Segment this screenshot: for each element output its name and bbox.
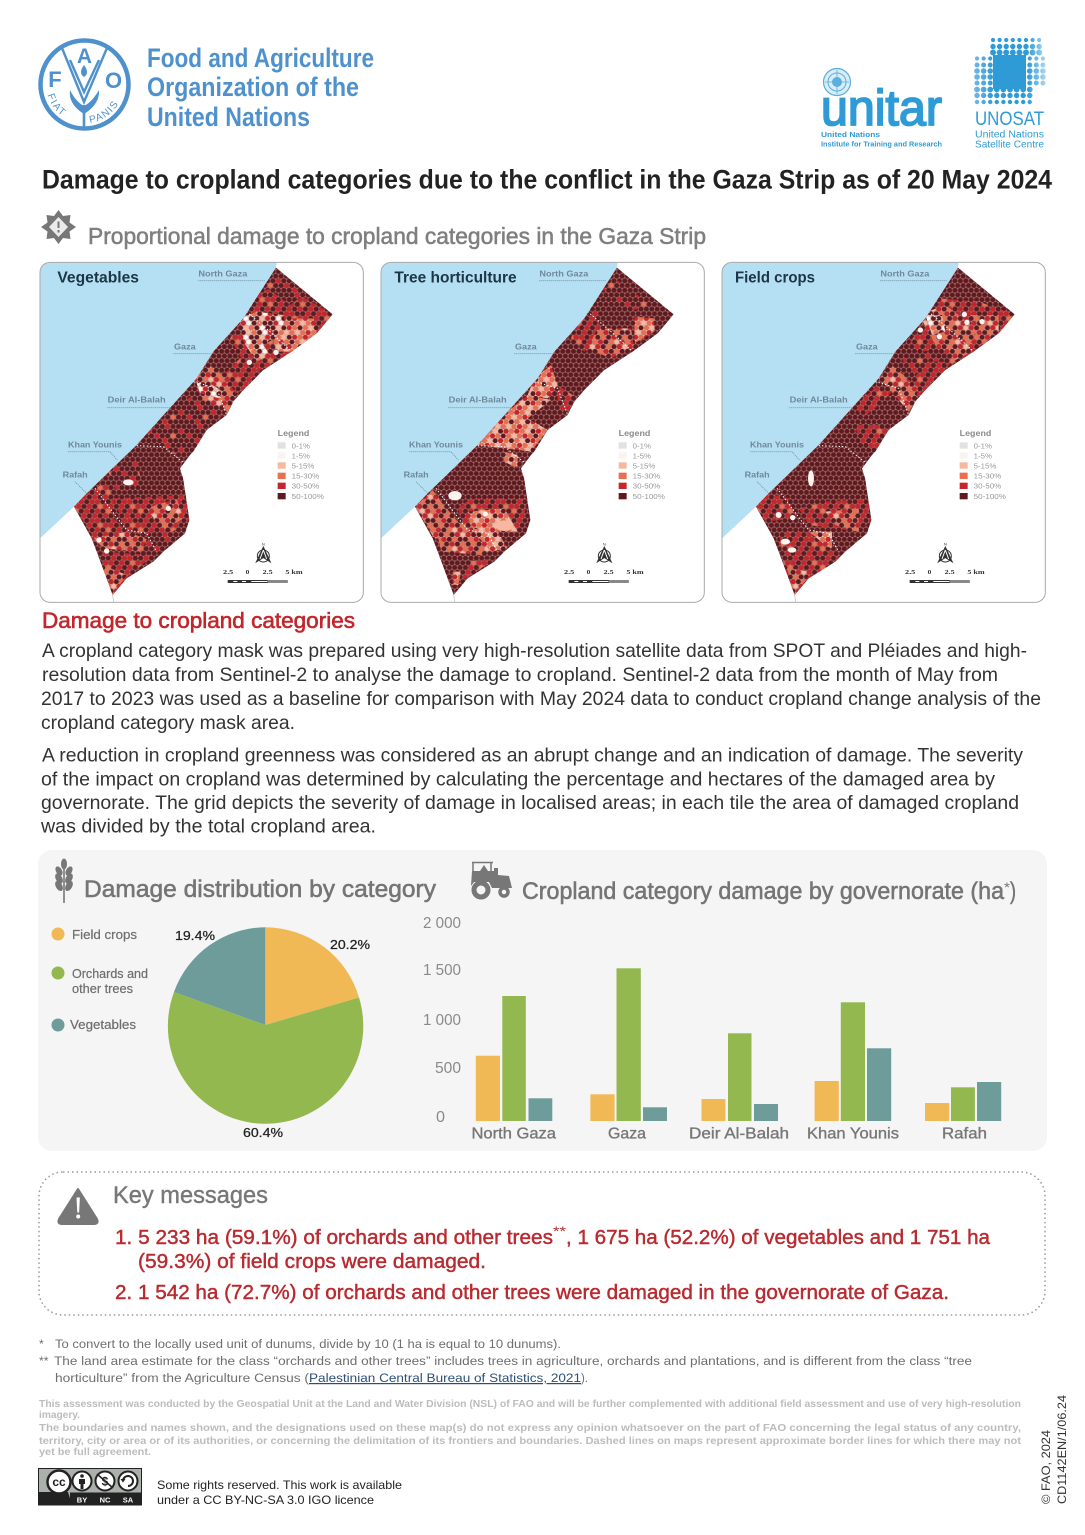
- licence text: under a CC BY-NC-SA 3.0 IGO licence: [157, 1493, 374, 1507]
- map legend: 30-50%: [292, 482, 320, 491]
- north arrow and scale bar: N: [262, 541, 265, 546]
- governorate labels: Gaza: [856, 341, 878, 351]
- text block: method paragraph 2: [40, 744, 1023, 838]
- hex grid damage map: [63, 262, 337, 602]
- footnotes: The land area estimate for the class “orchards and other trees” includes trees in agriculture, orchards and plantations, and is different from the class “tree: [54, 1354, 972, 1368]
- y axis labels: [423, 915, 461, 1126]
- governorate labels: North Gaza: [539, 268, 589, 278]
- pie chart: 19.4%: [175, 928, 215, 943]
- bars: North Gaza: North Gaza: [472, 1126, 556, 1142]
- y axis labels: 1 000: [423, 1012, 461, 1029]
- bar chart: [423, 915, 1001, 1142]
- FAO logo: PANIS: [89, 102, 118, 123]
- disclaimer: yet be full agreement.: [39, 1446, 151, 1458]
- text block: method paragraph 2: was divided by the total cropland area.: [40, 816, 376, 838]
- icon: Creative Commons badge: [38, 1468, 142, 1505]
- icon: Creative Commons badge: cc: [52, 1475, 66, 1489]
- panel: Vegetables map: [40, 262, 363, 602]
- map legend: 1-5%: [633, 451, 651, 460]
- map legend: [278, 428, 324, 501]
- key message 1: 1. 5 233 ha (59.1%) of orchards and other trees: [115, 1226, 553, 1249]
- text block: method paragraph 1: 2017 to 2023 was used as a baseline for comparison with May 2024 data to conduct cropland change analysis of the: [41, 688, 1041, 710]
- governorate labels: Gaza: [174, 341, 196, 351]
- governorate labels: Rafah: [745, 469, 770, 479]
- north arrow and scale bar: 0: [587, 569, 591, 576]
- map legend: 5-15%: [974, 461, 997, 470]
- UNOSAT logo: Satellite Centre: [975, 138, 1044, 150]
- FAO logo: F: [48, 67, 62, 92]
- north arrow and scale bar: 5 km: [626, 569, 644, 576]
- pie chart: 20.2%: [330, 937, 370, 952]
- key message 1: , 1 675 ha (52.2%) of vegetables and 1 751 ha: [566, 1226, 991, 1249]
- governorate labels: Rafah: [404, 469, 429, 479]
- bars: Khan Younis: Khan Younis: [807, 1126, 899, 1142]
- map legend: 5-15%: [633, 461, 656, 470]
- map legend: 50-100%: [292, 492, 324, 501]
- panel title: Vegetables: [57, 270, 139, 287]
- icon: tractor: [471, 862, 512, 897]
- text block: method paragraph 1: A cropland category mask was prepared using very high-resolution satellite data from SPOT and Pléiades and high-: [42, 640, 1027, 662]
- text block: method paragraph 1: resolution data from Sentinel-2 to analyse the damage to cropland. Sentinel-2 data from the month of May from: [42, 664, 998, 686]
- FAO logo: [38, 38, 131, 131]
- footnotes: ).: [581, 1371, 588, 1385]
- text block: method paragraph 2: A reduction in cropland greenness was considered as an abrupt change and an indication of damage. The severity: [42, 744, 1023, 766]
- governorate labels: North Gaza: [198, 268, 248, 278]
- document reference, rotated: [1039, 1395, 1069, 1504]
- map legend: Legend: [960, 428, 991, 438]
- footnotes: **: [39, 1354, 49, 1368]
- panel title: Field crops: [735, 270, 815, 287]
- map legend: 5-15%: [292, 461, 315, 470]
- governorate labels: [404, 268, 606, 493]
- pie legend: Orchards and: [72, 967, 148, 981]
- map legend: [619, 428, 665, 501]
- pie legend: Vegetables: [70, 1018, 136, 1032]
- governorate labels: North Gaza: [880, 268, 930, 278]
- icon: Creative Commons badge: $: [102, 1474, 109, 1488]
- y axis labels: 1 500: [423, 962, 461, 979]
- disclaimer: imagery.: [39, 1409, 80, 1421]
- governorate labels: Deir Al-Balah: [449, 395, 507, 405]
- key message 1: **: [553, 1223, 567, 1239]
- north arrow and scale bar: 0: [928, 569, 932, 576]
- disclaimer: The boundaries and names shown, and the designations used on these map(s) do not express any opinion whatsoever on the part of FAO concerning the legal status of any country,: [39, 1422, 1021, 1434]
- governorate labels: Gaza: [515, 341, 537, 351]
- north arrow and scale bar: 2.5: [905, 569, 916, 576]
- bars: Rafah: Rafah: [942, 1126, 987, 1142]
- governorate labels: Khan Younis: [409, 439, 463, 449]
- footnotes: To convert to the locally used unit of dunums, divide by 10 (1 ha is equal to 10 dunums).: [55, 1337, 561, 1351]
- UNOSAT logo: United Nations: [975, 128, 1044, 140]
- text block: method paragraph 1: [41, 640, 1041, 734]
- y axis labels: 0: [436, 1109, 445, 1126]
- map legend: 50-100%: [974, 492, 1006, 501]
- governorate labels: Deir Al-Balah: [790, 395, 848, 405]
- pie legend: other trees: [72, 982, 133, 996]
- map legend: 50-100%: [633, 492, 665, 501]
- north arrow and scale bar: 2.5: [604, 569, 614, 576]
- UNOSAT logo: [975, 40, 1044, 150]
- document reference, rotated: © FAO, 2024: [1039, 1430, 1053, 1504]
- bars: Gaza: Gaza: [608, 1126, 646, 1142]
- panel: key messages: [39, 1172, 1045, 1315]
- disclaimer: This assessment was conducted by the Geospatial Unit at the Land and Water Division (NSL) of FAO and will be further complemented with additional field assessment and use of very high-resolution: [39, 1398, 1021, 1410]
- footnotes: Palestinian Central Bureau of Statistics, 2021: [309, 1371, 581, 1385]
- map legend: 0-1%: [633, 441, 651, 450]
- hex grid damage map: [745, 262, 1019, 602]
- FAO logo: FIAT: [48, 93, 66, 114]
- icon: wheat: [53, 858, 75, 903]
- governorate labels: Rafah: [63, 469, 88, 479]
- north arrow and scale bar: [564, 541, 644, 583]
- icon: Creative Commons badge: NC: [100, 1496, 111, 1504]
- map legend: Legend: [619, 428, 650, 438]
- north arrow and scale bar: 2.5: [223, 569, 234, 576]
- heading: proportional damage: Proportional damage to cropland categories in the Gaza Strip: [88, 223, 706, 249]
- map legend: 15-30%: [974, 472, 1002, 481]
- text block: method paragraph 2: of the impact on cropland was determined by calculating the percentage and hectares of the damaged area by: [41, 768, 995, 790]
- north arrow and scale bar: [905, 541, 985, 583]
- UNITAR logo: unitar: [821, 80, 942, 136]
- heading: cropland damage by governorate: Cropland category damage by governorate (ha: [522, 878, 1005, 905]
- map legend: 0-1%: [292, 441, 310, 450]
- governorate labels: Khan Younis: [68, 439, 122, 449]
- UNITAR logo: Institute for Training and Research: [821, 140, 942, 148]
- north arrow and scale bar: 2.5: [564, 569, 575, 576]
- icon: Creative Commons badge: BY: [77, 1496, 87, 1504]
- text block: method paragraph 2: governorate. The grid depicts the severity of damage in localised areas; in each tile the area of damaged cropland: [41, 792, 1019, 814]
- governorate labels: [745, 268, 947, 493]
- bars: Rafah: [925, 1082, 1001, 1142]
- UNOSAT logo: UNOSAT: [975, 109, 1044, 130]
- pie legend: [52, 928, 148, 1032]
- document reference, rotated: CD1142EN/1/06.24: [1055, 1395, 1069, 1504]
- footnotes: *: [39, 1337, 44, 1351]
- map legend: 30-50%: [633, 482, 661, 491]
- hex grid damage map: [404, 262, 678, 602]
- map legend: 1-5%: [974, 451, 992, 460]
- FAO name: Organization of the: [147, 72, 359, 102]
- map legend: 30-50%: [974, 482, 1002, 491]
- bars: Khan Younis: [807, 1002, 899, 1142]
- map legend: Legend: [278, 428, 309, 438]
- bars: Deir Al-Balah: Deir Al-Balah: [689, 1126, 789, 1142]
- panel title: Tree horticulture: [394, 270, 517, 287]
- panel: Field crops map: [722, 262, 1045, 602]
- footnotes: horticulture” from the Agriculture Census (: [55, 1371, 309, 1385]
- UNITAR logo: [821, 68, 942, 148]
- disclaimer: [39, 1398, 1022, 1458]
- governorate labels: Khan Younis: [750, 439, 804, 449]
- key message 2: 2. 1 542 ha (72.7%) of orchards and other trees were damaged in the governorate of Gaza.: [115, 1281, 949, 1304]
- panel: charts background: [38, 850, 1047, 1151]
- map legend: [960, 428, 1006, 501]
- heading: damage distribution: Damage distribution by category: [84, 876, 436, 903]
- y axis labels: 500: [435, 1060, 461, 1077]
- heading: key messages: Key messages: [113, 1182, 268, 1209]
- north arrow and scale bar: 5 km: [967, 569, 985, 576]
- FAO name: Food and Agriculture: [147, 43, 374, 73]
- pie chart: [168, 927, 370, 1140]
- icon: proportional damage star: [41, 210, 76, 244]
- bars: Gaza: [590, 968, 667, 1142]
- heading: cropland damage by governorate: *: [1004, 879, 1011, 895]
- licence text: [157, 1478, 402, 1507]
- map legend: 1-5%: [292, 451, 310, 460]
- bars: North Gaza: [472, 996, 556, 1142]
- key message 1: [115, 1223, 991, 1273]
- text block: method paragraph 1: cropland category mask area.: [41, 712, 295, 734]
- governorate labels: [63, 268, 265, 493]
- licence text: Some rights reserved. This work is available: [157, 1478, 402, 1492]
- FAO name: United Nations: [147, 102, 310, 132]
- FAO name: [147, 43, 374, 132]
- footnotes: [39, 1337, 972, 1385]
- bars: Deir Al-Balah: [689, 1033, 789, 1142]
- icon: warning triangle: [58, 1189, 98, 1224]
- key message 1: (59.3%) of field crops were damaged.: [138, 1250, 486, 1273]
- FAO logo: O: [105, 68, 122, 93]
- y axis labels: 2 000: [423, 915, 461, 932]
- governorate labels: Deir Al-Balah: [108, 395, 166, 405]
- icon: Creative Commons badge: SA: [123, 1496, 134, 1504]
- heading: damage to cropland categories: Damage to cropland categories: [42, 608, 355, 633]
- map legend: 15-30%: [633, 472, 661, 481]
- heading: cropland damage by governorate: ): [1010, 878, 1016, 905]
- pie chart: 60.4%: [243, 1125, 283, 1140]
- disclaimer: territory, city or area or of its authorities, or concerning the delimitation of its frontiers and boundaries. Dashed lines on maps represent approximate border lines for which there may not: [39, 1435, 1022, 1447]
- north arrow and scale bar: 2.5: [263, 569, 273, 576]
- panel: Tree horticulture map: [381, 262, 704, 602]
- map legend: 15-30%: [292, 472, 320, 481]
- north arrow and scale bar: [223, 541, 303, 583]
- north arrow and scale bar: 0: [246, 569, 250, 576]
- north arrow and scale bar: 5 km: [285, 569, 303, 576]
- north arrow and scale bar: 2.5: [945, 569, 955, 576]
- north arrow and scale bar: N: [944, 541, 947, 546]
- FAO logo: A: [77, 45, 92, 68]
- map legend: 0-1%: [974, 441, 992, 450]
- UNITAR logo: United Nations: [821, 130, 880, 139]
- north arrow and scale bar: N: [603, 541, 606, 546]
- pie legend: Field crops: [72, 928, 137, 942]
